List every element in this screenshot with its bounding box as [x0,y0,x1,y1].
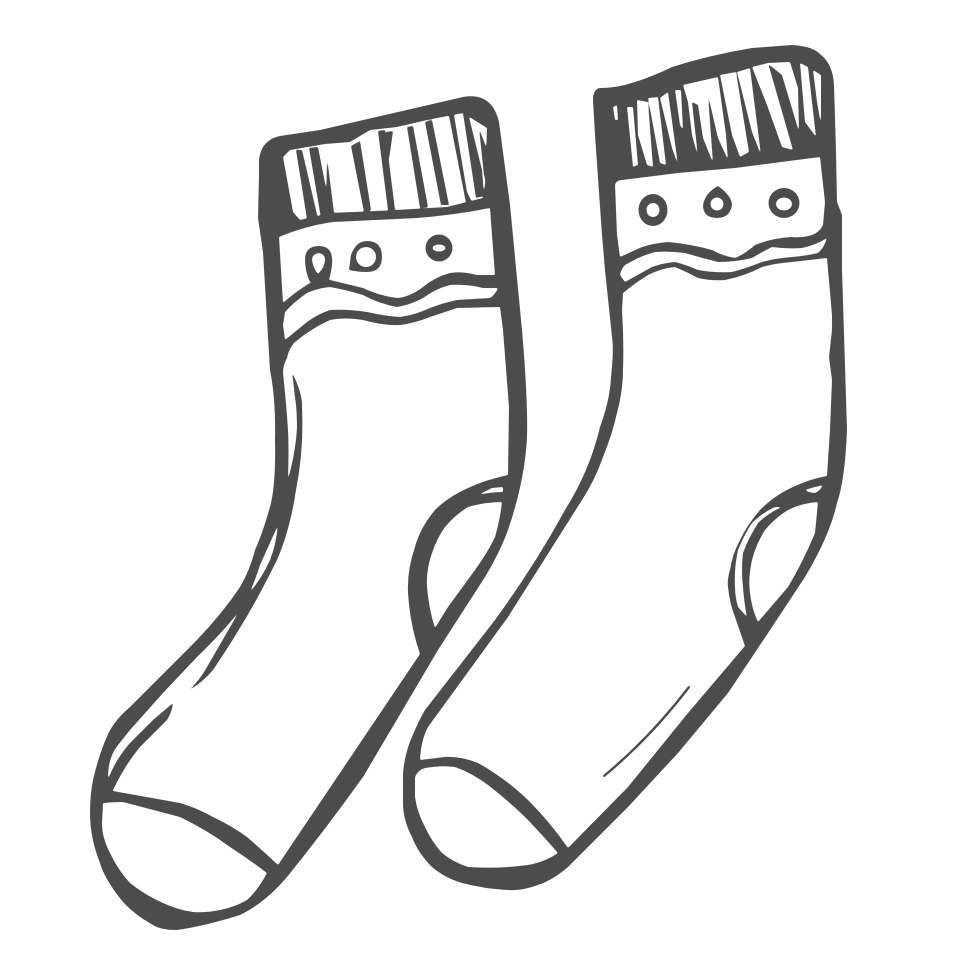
right sock silhouette [403,45,847,890]
right sock highlight [604,687,689,776]
left sock highlight gap [250,525,278,592]
left sock [90,96,527,930]
right sock dot 2 [703,186,732,218]
right sock dots [638,186,800,226]
left sock dot 3 [426,234,452,262]
right sock heel [735,485,823,622]
right sock body [420,258,832,848]
left sock heel [427,487,503,628]
left sock dots [305,234,452,282]
left sock rib shadows [296,113,487,219]
right sock stripe [620,238,827,282]
right sock [403,45,847,890]
left sock dot 1 [305,246,332,282]
left sock stripe [283,285,498,340]
left sock body [108,307,509,865]
right sock band [615,157,825,258]
left sock dot 2 [349,241,382,272]
right sock toe [415,766,558,868]
left sock cuff ribbing [283,113,487,220]
right sock cuff ribbing [613,62,821,167]
right sock dot 1 [638,194,668,226]
left sock toe [102,802,267,912]
left sock highlights [107,372,302,790]
left sock cuff white area [283,113,487,220]
left sock silhouette [90,96,527,930]
left sock band [279,208,495,303]
right sock dot 3 [768,188,800,218]
